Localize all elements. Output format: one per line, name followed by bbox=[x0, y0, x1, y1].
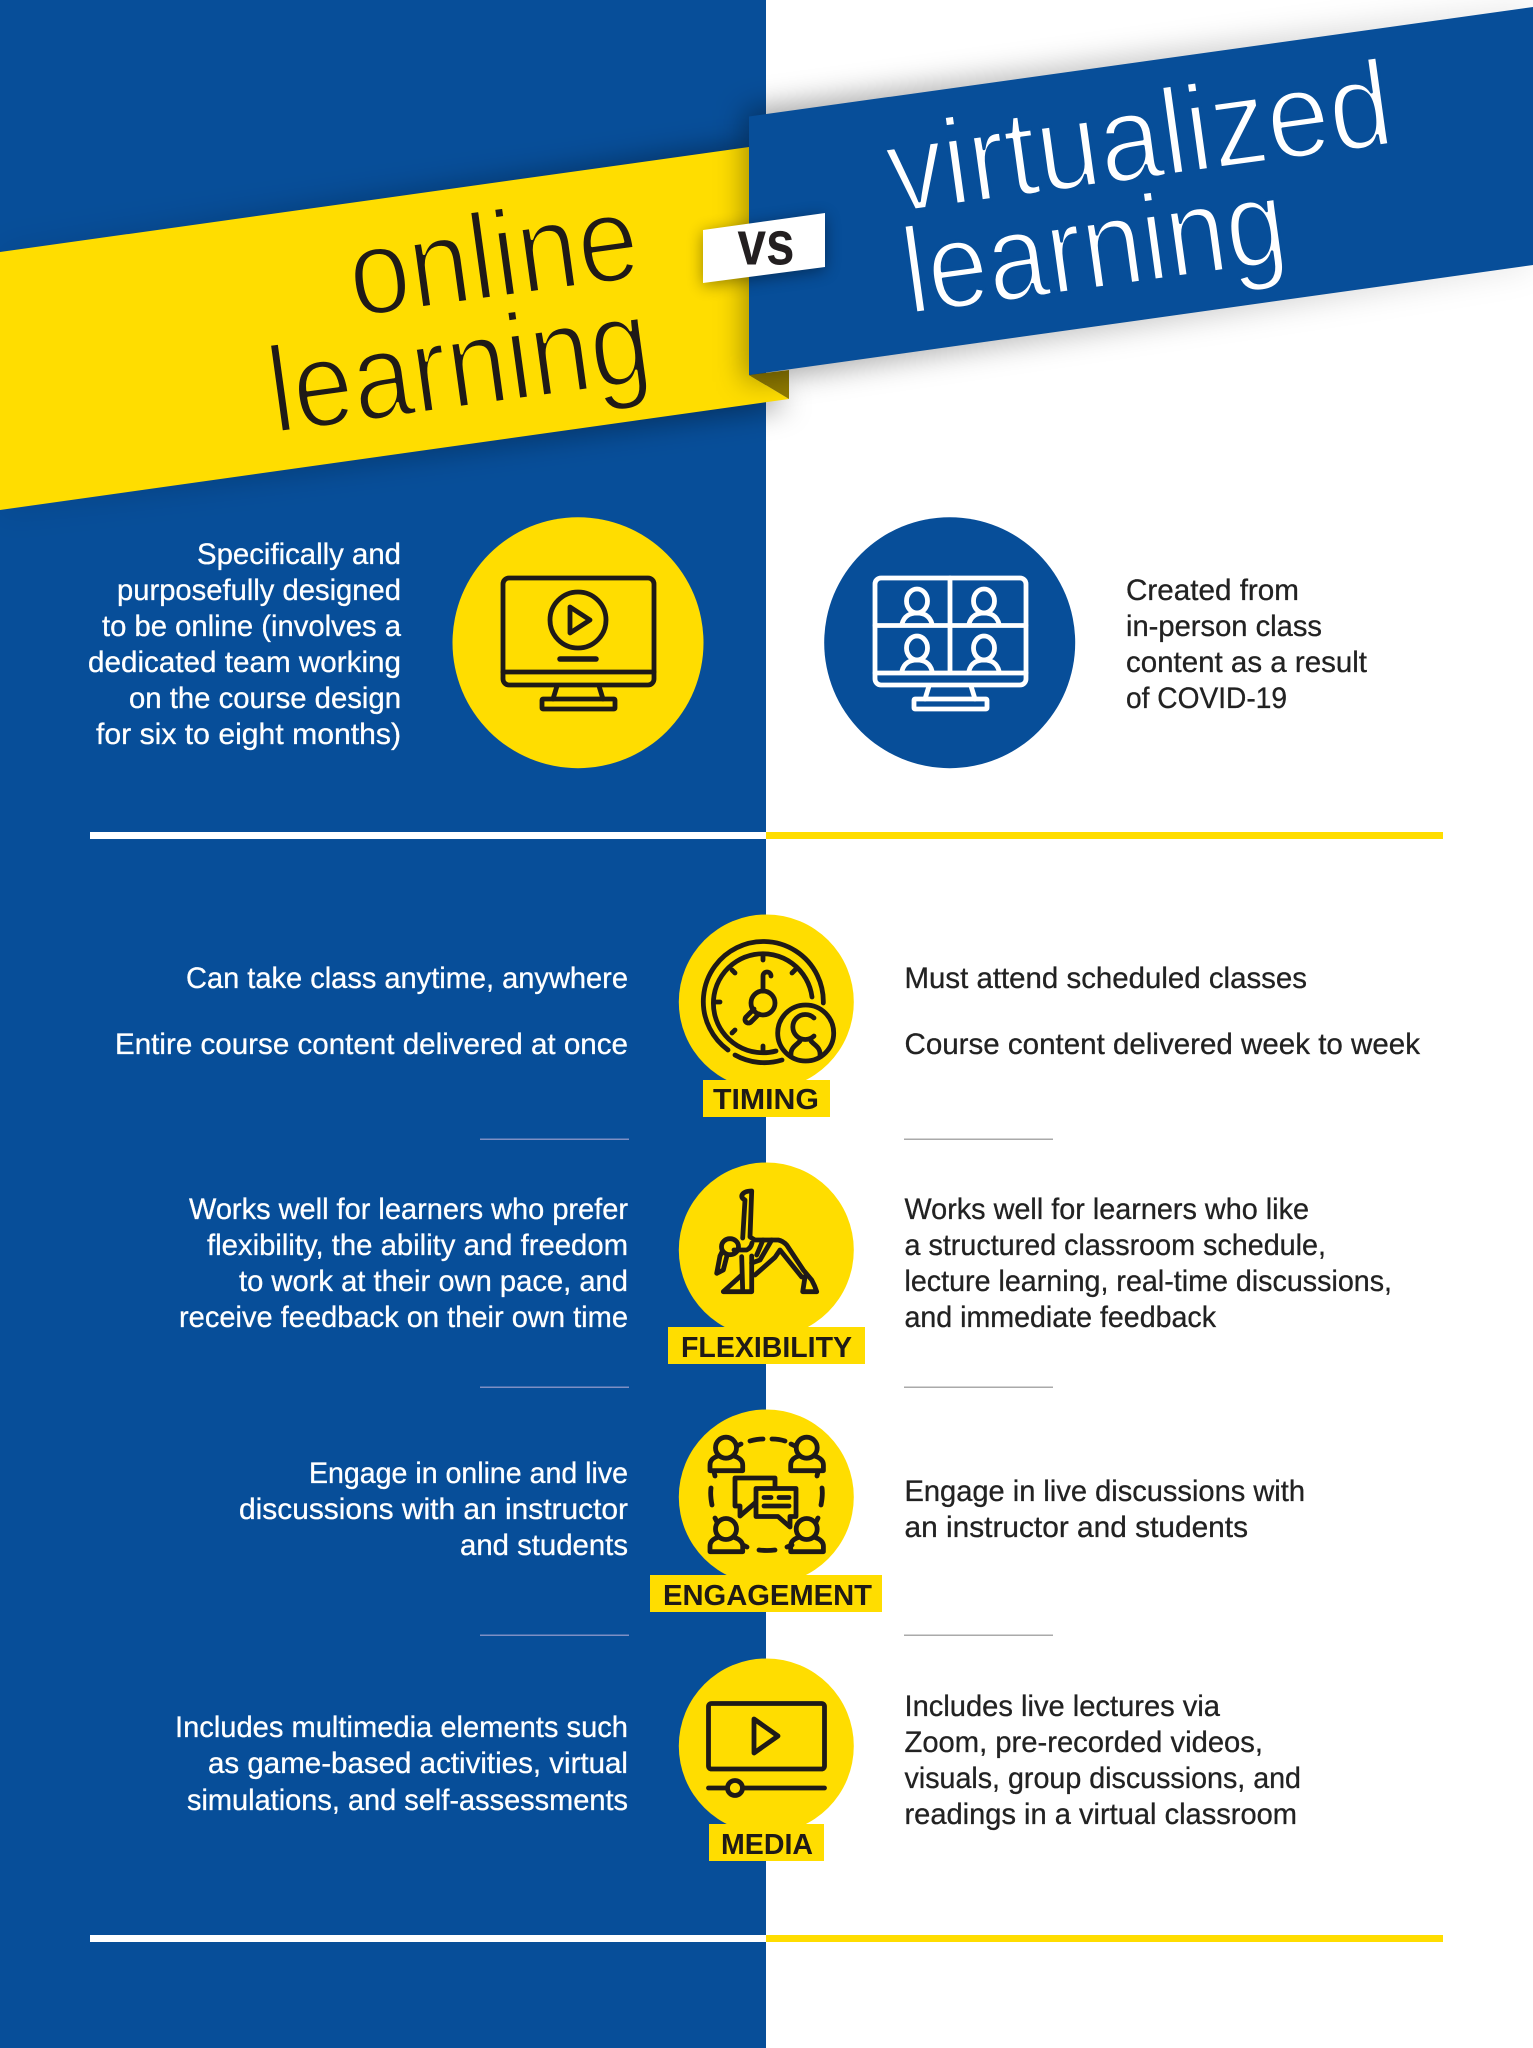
row: engagement, online side: and students bbox=[460, 1529, 628, 1562]
row: engagement, online side bbox=[239, 1457, 628, 1562]
row: media, virtualized side: readings in a virtual classroom bbox=[904, 1798, 1297, 1831]
row: flexibility, online side: Works well for learners who prefer bbox=[189, 1193, 628, 1226]
row: flexibility, virtualized side: Works well for learners who like bbox=[904, 1193, 1309, 1226]
heading: virtualized learning: virtualized bbox=[878, 35, 1400, 239]
banner: virtualized learning ribbon bbox=[744, 1, 1533, 382]
row: media, virtualized side: Zoom, pre-recorded videos, bbox=[904, 1726, 1263, 1759]
row: media, online side: Includes multimedia elements such bbox=[175, 1711, 628, 1744]
row: timing, online side bbox=[115, 962, 628, 1061]
label: timing bbox=[703, 1080, 830, 1117]
icon: flexibility yoga pose bbox=[679, 1162, 854, 1338]
row: engagement, online side: discussions with an instructor bbox=[239, 1493, 628, 1526]
heading: online learning: online bbox=[339, 168, 646, 343]
panel: online learning background bbox=[0, 0, 766, 2048]
row: media, online side: simulations, and self-assessments bbox=[187, 1784, 628, 1817]
row: engagement, virtualized side: an instructor and students bbox=[904, 1511, 1248, 1544]
text: virtualized learning definition: in-person class bbox=[1126, 610, 1322, 643]
text: online learning definition bbox=[88, 538, 402, 751]
text: virtualized learning definition: of COVID-19 bbox=[1126, 682, 1287, 715]
label: timing: TIMING bbox=[713, 1084, 819, 1116]
row: flexibility, virtualized side: and immediate feedback bbox=[904, 1301, 1216, 1334]
text: virtualized learning definition: content as a result bbox=[1126, 646, 1367, 679]
row: media, virtualized side: visuals, group discussions, and bbox=[904, 1762, 1301, 1795]
label: flexibility: FLEXIBILITY bbox=[681, 1332, 852, 1364]
heading: virtualized learning bbox=[878, 35, 1400, 340]
heading: virtualized learning: learning bbox=[894, 152, 1294, 340]
icon: engagement group discussion bbox=[679, 1410, 854, 1584]
row: timing, virtualized side: Course content delivered week to week bbox=[904, 1028, 1420, 1061]
banner: online learning ribbon bbox=[0, 143, 790, 516]
row: timing, online side: Entire course content delivered at once bbox=[115, 1028, 628, 1061]
text: online learning definition: purposefully designed bbox=[117, 574, 401, 607]
row: media, online side: as game-based activities, virtual bbox=[208, 1747, 628, 1780]
row: flexibility, online side bbox=[179, 1193, 628, 1334]
row: media, online side bbox=[175, 1711, 628, 1817]
row: engagement, virtualized side: Engage in live discussions with bbox=[904, 1475, 1305, 1508]
row: engagement, virtualized side bbox=[904, 1475, 1305, 1544]
row: flexibility, online side: flexibility, the ability and freedom bbox=[207, 1229, 628, 1262]
badge: vs: vs bbox=[738, 210, 794, 278]
label: engagement: ENGAGEMENT bbox=[663, 1580, 872, 1612]
icon: video call monitor bbox=[824, 517, 1075, 768]
heading: online learning bbox=[259, 168, 658, 459]
text: virtualized learning definition bbox=[1126, 574, 1367, 715]
row: media, virtualized side: Includes live lectures via bbox=[904, 1690, 1221, 1723]
row: flexibility, virtualized side bbox=[904, 1193, 1392, 1334]
row: timing, virtualized side bbox=[904, 962, 1420, 1061]
row: flexibility, online side: to work at their own pace, and bbox=[239, 1265, 628, 1298]
icon: monitor with play button bbox=[452, 517, 704, 768]
text: online learning definition: dedicated team working bbox=[88, 646, 401, 679]
label: media: MEDIA bbox=[721, 1829, 813, 1861]
icon: timing clock with person bbox=[679, 914, 854, 1090]
text: virtualized learning definition: Created from bbox=[1126, 574, 1299, 607]
badge: vs bbox=[703, 210, 825, 286]
row: flexibility, virtualized side: lecture learning, real-time discussions, bbox=[904, 1265, 1392, 1298]
row: flexibility, virtualized side: a structured classroom schedule, bbox=[904, 1229, 1326, 1262]
text: online learning definition: for six to eight months) bbox=[96, 718, 401, 751]
row: engagement, online side: Engage in online and live bbox=[309, 1457, 628, 1490]
text: online learning definition: to be online (involves a bbox=[102, 610, 402, 643]
heading: online learning: learning bbox=[259, 272, 658, 459]
icon: media video player bbox=[679, 1658, 854, 1834]
text: online learning definition: on the course design bbox=[129, 682, 401, 715]
row: flexibility, online side: receive feedback on their own time bbox=[179, 1301, 628, 1334]
row: media, virtualized side bbox=[904, 1690, 1301, 1831]
text: online learning definition: Specifically and bbox=[197, 538, 401, 571]
row: timing, virtualized side: Must attend scheduled classes bbox=[904, 962, 1307, 995]
row: timing, online side: Can take class anytime, anywhere bbox=[186, 962, 628, 995]
